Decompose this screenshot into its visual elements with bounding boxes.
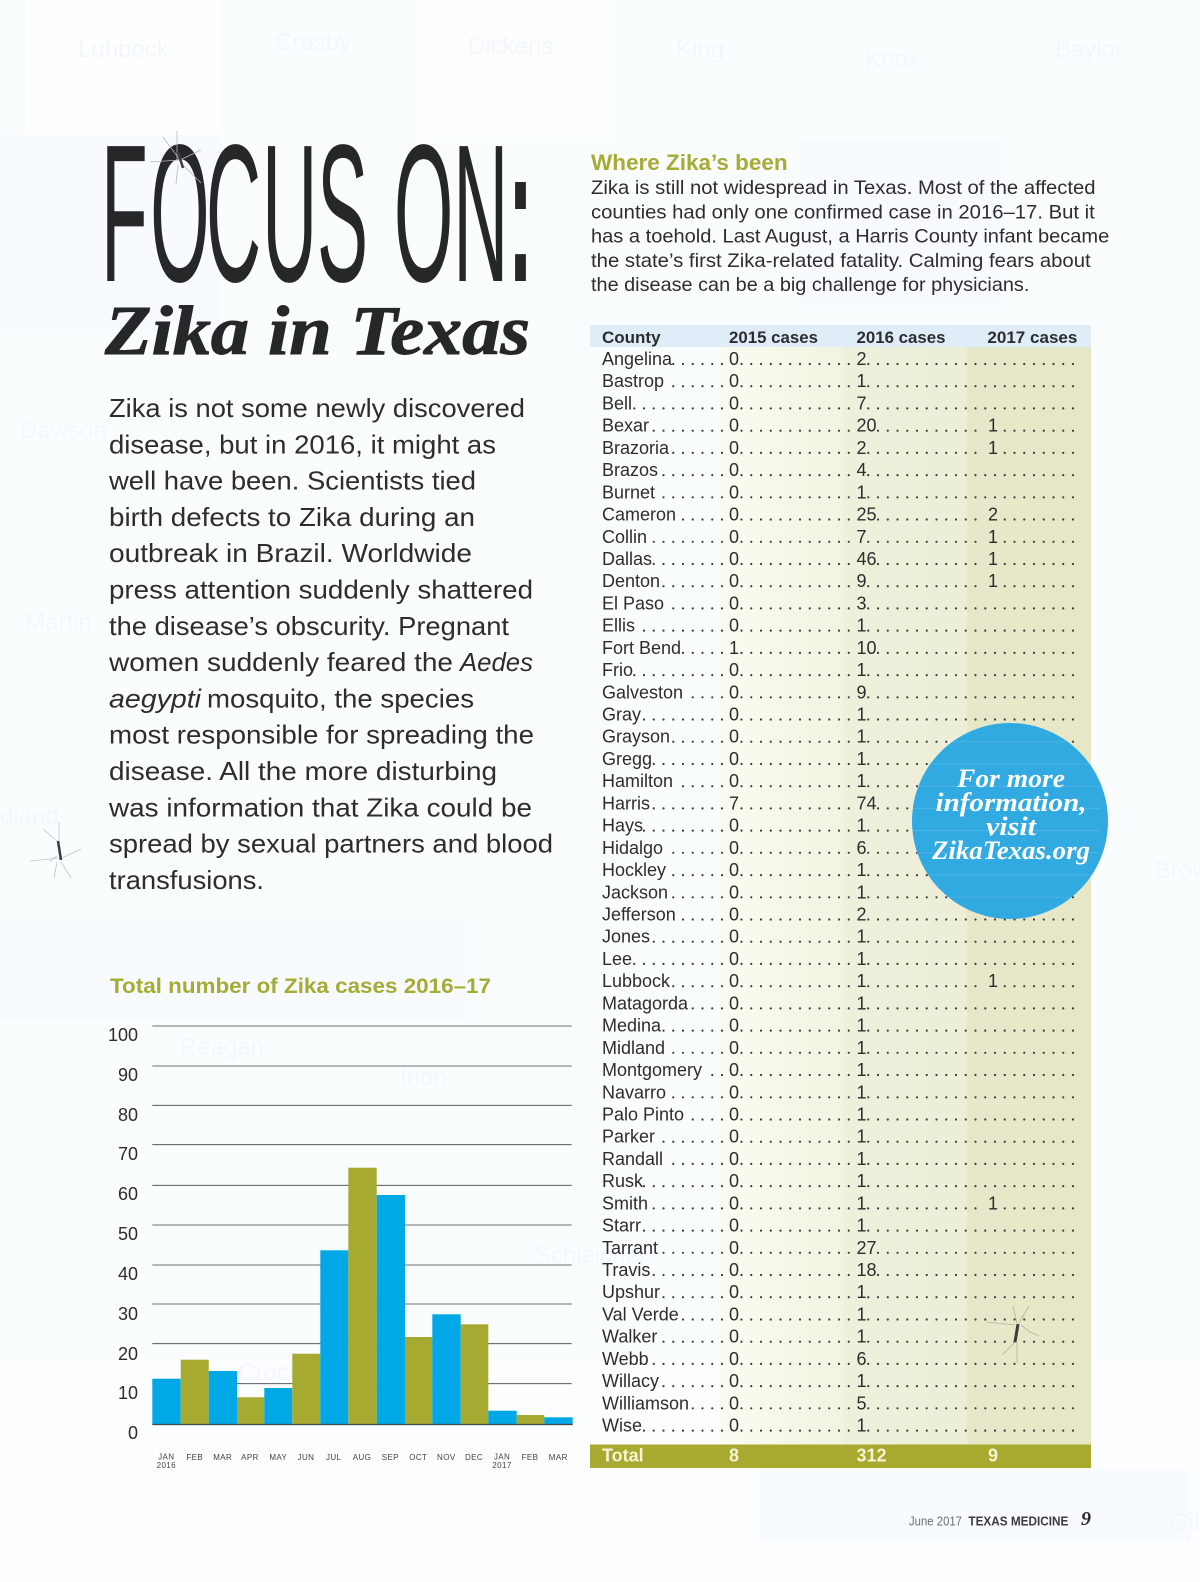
x axis labels: 2016 (157, 1461, 176, 1470)
table rows: 1 (856, 1216, 867, 1236)
table rows: 9 (856, 571, 867, 591)
y axis labels: 50 (118, 1224, 138, 1244)
y axis labels: 80 (118, 1105, 138, 1125)
table rows: 6 (856, 838, 867, 858)
background: faint county map: Dickens (468, 33, 553, 60)
table rows: Wise (602, 1416, 642, 1436)
table rows: Hockley (602, 860, 666, 880)
y axis labels: 10 (118, 1383, 138, 1403)
table rows: Brazos (602, 460, 658, 480)
table rows: 1 (988, 571, 998, 591)
table rows: 9 (856, 682, 867, 702)
table rows: Jackson (602, 882, 668, 902)
table rows: 0 (729, 482, 739, 502)
table rows: 0 (729, 816, 739, 836)
table rows: Hamilton (602, 771, 673, 791)
body text: disease. All the more disturbing (109, 756, 497, 786)
y axis labels: 0 (128, 1423, 138, 1443)
table rows: 0 (729, 1060, 739, 1080)
y axis labels: 70 (118, 1144, 138, 1164)
x axis labels: DEC (465, 1453, 483, 1462)
table rows: 0 (729, 393, 739, 413)
table rows: 1 (988, 527, 998, 547)
table rows: Lee (602, 949, 632, 969)
footer: June 2017 (909, 1514, 962, 1528)
table rows: 0 (729, 882, 739, 902)
body text: most responsible for spreading the (109, 720, 534, 750)
table rows: 1 (856, 771, 867, 791)
table rows: 0 (729, 1238, 739, 1258)
table rows: 2 (988, 504, 998, 524)
bar chart (108, 1025, 573, 1470)
table rows: 1 (856, 927, 867, 947)
x axis labels: FEB (186, 1453, 203, 1462)
table rows: Bexar (602, 416, 649, 436)
x axis labels: JAN (158, 1452, 174, 1462)
title: FOCUS ON: : (508, 103, 533, 323)
table rows: 0 (729, 860, 739, 880)
table rows: 1 (856, 949, 867, 969)
table rows: Montgomery (602, 1060, 702, 1080)
table rows: Starr (602, 1216, 641, 1236)
table rows: 0 (729, 438, 739, 458)
table rows: Williamson (602, 1393, 689, 1413)
body text: women suddenly feared the (108, 647, 453, 677)
table rows: 27 (856, 1238, 877, 1258)
table rows: 0 (729, 1171, 739, 1191)
table rows: 1 (856, 882, 867, 902)
table rows: 0 (729, 682, 739, 702)
table rows: 1 (988, 549, 998, 569)
background: faint county map: dland (0, 803, 59, 830)
table rows: 1 (988, 1193, 998, 1213)
table rows: Jefferson (602, 904, 676, 924)
table rows: Walker (602, 1327, 657, 1347)
table rows: Gray (602, 704, 641, 724)
table column shading (720, 347, 1091, 1445)
title: FOCUS ON: FOCUS ON (101, 103, 508, 323)
table rows: Palo Pinto (602, 1104, 684, 1124)
table total row: 8 (729, 1446, 739, 1466)
table rows: 1 (856, 1304, 867, 1324)
table rows: 46 (856, 549, 877, 569)
table rows: 74 (856, 793, 877, 813)
table rows: 1 (988, 971, 998, 991)
table rows: 2 (856, 349, 867, 369)
footer (909, 1508, 1091, 1530)
callout: more information: For more (956, 764, 1065, 793)
table rows: 0 (729, 1416, 739, 1436)
body text: the disease’s obscurity. Pregnant (109, 611, 510, 641)
table rows: 0 (729, 771, 739, 791)
table rows: 4 (856, 460, 867, 480)
table rows: 0 (729, 949, 739, 969)
background: faint county map: Gil (1170, 1509, 1199, 1536)
table rows: 1 (856, 1171, 867, 1191)
table rows: 0 (729, 1193, 739, 1213)
table rows: Bell (602, 393, 632, 413)
table rows: 1 (856, 1038, 867, 1058)
table rows: 0 (729, 993, 739, 1013)
body text: Zika is not some newly discovered (109, 393, 525, 423)
table rows: 0 (729, 549, 739, 569)
table rows: Travis (602, 1260, 650, 1280)
table rows: Navarro (602, 1082, 666, 1102)
table rows: 7 (856, 527, 867, 547)
table rows: 0 (729, 1393, 739, 1413)
body text (108, 393, 553, 895)
table rows: 18 (856, 1260, 877, 1280)
x axis labels: JAN (494, 1452, 510, 1462)
table rows: Jones (602, 927, 650, 947)
table rows: 5 (856, 1393, 867, 1413)
table rows: Midland (602, 1038, 665, 1058)
table rows: 0 (729, 349, 739, 369)
table rows: 1 (856, 1060, 867, 1080)
table rows: 1 (856, 1104, 867, 1124)
table header: County (602, 328, 661, 347)
body text: disease, but in 2016, it might as (109, 429, 496, 459)
background: faint county map: Crockett (238, 1359, 328, 1386)
x axis labels: JUL (326, 1453, 342, 1462)
x axis labels: OCT (409, 1453, 427, 1462)
intro paragraph: has a toehold. Last August, a Harris County infant became (591, 226, 1109, 248)
background: faint county map: Martin (25, 609, 92, 636)
table rows: 7 (856, 393, 867, 413)
table rows: 0 (729, 1216, 739, 1236)
table rows: 0 (729, 971, 739, 991)
table rows: 0 (729, 1016, 739, 1036)
icon: mosquito left margin (30, 822, 81, 878)
table rows: 0 (729, 1104, 739, 1124)
table rows: 0 (729, 660, 739, 680)
background: faint county map: Irion (400, 1064, 447, 1091)
table rows: 0 (729, 1149, 739, 1169)
table rows: 0 (729, 460, 739, 480)
table rows: Burnet (602, 482, 655, 502)
body text: birth defects to Zika during an (109, 502, 475, 532)
callout: more information (900, 723, 1108, 919)
table total row: 312 (856, 1446, 887, 1466)
body text: was information that Zika could be (108, 792, 532, 822)
table rows (602, 349, 998, 1436)
table rows: 0 (729, 1260, 739, 1280)
table total row: Total (602, 1446, 644, 1466)
table rows: 0 (729, 527, 739, 547)
body text: well have been. Scientists tied (108, 466, 476, 496)
table header: 2017 cases (987, 328, 1077, 347)
table rows: Gregg (602, 749, 652, 769)
table dot leaders (634, 364, 1073, 1431)
x axis labels: 2017 (492, 1461, 512, 1470)
table rows: Fort Bend (602, 638, 681, 658)
table rows: 10 (856, 638, 877, 658)
table rows: 0 (729, 1282, 739, 1302)
x axis labels: FEB (522, 1453, 538, 1462)
table rows: 0 (729, 371, 739, 391)
table rows: 0 (729, 838, 739, 858)
table rows: Hays (602, 816, 643, 836)
table rows: 1 (856, 1016, 867, 1036)
table rows: 0 (729, 927, 739, 947)
table rows: Hidalgo (602, 838, 663, 858)
table rows: 0 (729, 1304, 739, 1324)
table rows: 1 (856, 1371, 867, 1391)
table header: 2015 cases (729, 328, 818, 347)
intro paragraph: the disease can be a big challenge for physicians. (591, 274, 1029, 296)
x axis labels (157, 1452, 568, 1470)
table rows: 1 (856, 1193, 867, 1213)
table rows: Medina (602, 1016, 662, 1036)
table rows: 2 (856, 438, 867, 458)
table rows: 0 (729, 749, 739, 769)
footer: TEXAS MEDICINE (968, 1514, 1068, 1528)
table rows: 1 (856, 749, 867, 769)
icon: mosquito on table (987, 1306, 1039, 1363)
table rows: 0 (729, 504, 739, 524)
intro paragraph: Zika is still not widespread in Texas. Most of the affected (591, 177, 1096, 199)
table rows: 1 (856, 993, 867, 1013)
table header (590, 325, 1091, 347)
table rows: 20 (856, 416, 877, 436)
background: faint county map: Baylor (1055, 36, 1123, 63)
table rows: 1 (856, 371, 867, 391)
table rows: Harris (602, 793, 650, 813)
table rows: Smith (602, 1193, 648, 1213)
table rows: 0 (729, 1127, 739, 1147)
table rows: Dallas (602, 549, 652, 569)
table rows: Matagorda (602, 993, 689, 1013)
table rows: Bastrop (602, 371, 664, 391)
x axis labels: JUN (298, 1453, 314, 1462)
callout: more information: visit (986, 812, 1037, 841)
background: faint county map: Reagan (180, 1034, 264, 1061)
table rows: El Paso (602, 593, 664, 613)
y axis labels: 100 (108, 1025, 138, 1045)
callout: more information: ZikaTexas.org (931, 836, 1090, 865)
footer: 9 (1081, 1508, 1091, 1530)
table rows: 1 (856, 1082, 867, 1102)
x axis labels: MAR (213, 1453, 232, 1462)
y axis labels: 60 (118, 1184, 138, 1204)
table total row: 9 (988, 1446, 998, 1466)
table rows: Ellis (602, 616, 635, 636)
background: faint county map: Crosby (275, 29, 351, 56)
table rows: 0 (729, 416, 739, 436)
background: faint county map: Knox (865, 46, 920, 73)
body text: press attention suddenly shattered (109, 574, 533, 604)
table rows: 0 (729, 704, 739, 724)
table rows: 1 (856, 860, 867, 880)
x axis labels: APR (241, 1453, 259, 1462)
y axis labels: 30 (118, 1304, 138, 1324)
table rows: Randall (602, 1149, 663, 1169)
table rows: Cameron (602, 504, 676, 524)
intro paragraph (591, 177, 1109, 296)
table: county cases (590, 325, 1091, 1468)
table rows: 0 (729, 616, 739, 636)
body text: spread by sexual partners and blood (109, 829, 553, 859)
background: faint county map: Schleicher (535, 1242, 647, 1269)
table rows: Brazoria (602, 438, 670, 458)
table rows: 0 (729, 904, 739, 924)
table rows: Willacy (602, 1371, 659, 1391)
table header: 2016 cases (856, 328, 946, 347)
y axis labels: 20 (118, 1344, 138, 1364)
callout: more information: information, (936, 788, 1086, 817)
table rows: 1 (856, 704, 867, 724)
y axis labels: 40 (118, 1264, 138, 1284)
table rows: 1 (856, 660, 867, 680)
x axis labels: AUG (353, 1453, 371, 1462)
table rows: Parker (602, 1127, 655, 1147)
table rows: Rusk (602, 1171, 644, 1191)
table rows: 0 (729, 1349, 739, 1369)
table rows: 0 (729, 1327, 739, 1347)
table rows: 1 (856, 727, 867, 747)
x axis labels: MAY (269, 1453, 288, 1462)
table rows: 0 (729, 1082, 739, 1102)
body text: mosquito, the species (207, 683, 474, 713)
table total row (590, 1444, 1091, 1468)
table rows: 1 (856, 482, 867, 502)
intro paragraph: the state’s first Zika-related fatality. Calming fears about (591, 250, 1091, 272)
table rows: Grayson (602, 727, 670, 747)
table rows: Angelina (602, 349, 673, 369)
table rows: 1 (856, 1127, 867, 1147)
table rows: 1 (988, 438, 998, 458)
intro paragraph: counties had only one confirmed case in 2016–17. But it (591, 201, 1095, 223)
table rows: Collin (602, 527, 647, 547)
background: faint county map: Lubbock (78, 36, 170, 63)
table rows: 0 (729, 727, 739, 747)
bars (152, 1168, 573, 1424)
subtitle: Zika in Texas: Zika in Texas (104, 293, 530, 370)
table rows: 0 (729, 593, 739, 613)
background: faint county map: King (676, 36, 724, 63)
y axis labels: 90 (118, 1065, 138, 1085)
table rows: 7 (729, 793, 739, 813)
x axis labels: NOV (437, 1453, 456, 1462)
table rows: 2 (856, 904, 867, 924)
table rows: 0 (729, 1371, 739, 1391)
table rows: Galveston (602, 682, 683, 702)
background: faint county map: Dawson (20, 417, 107, 444)
table rows: 25 (856, 504, 877, 524)
table rows: 0 (729, 1038, 739, 1058)
chart heading: Total number of Zika cases 2016–17 (110, 975, 491, 998)
table rows: Webb (602, 1349, 649, 1369)
body text: aegypti (109, 683, 202, 713)
x axis labels: SEP (382, 1453, 399, 1462)
table rows: 1 (856, 1149, 867, 1169)
table rows: Upshur (602, 1282, 660, 1302)
table rows: 1 (856, 1416, 867, 1436)
table rows: Denton (602, 571, 660, 591)
body text: transfusions. (109, 865, 264, 895)
body text: Aedes (458, 647, 533, 677)
table rows: 1 (856, 1282, 867, 1302)
table rows: Frio (602, 660, 633, 680)
heading: Where Zika's been: Where Zika’s been (591, 150, 788, 175)
icon: mosquito on title (150, 131, 201, 184)
table rows: Tarrant (602, 1238, 658, 1258)
table rows: 1 (856, 816, 867, 836)
x axis labels: MAR (549, 1453, 568, 1462)
body text: outbreak in Brazil. Worldwide (109, 538, 472, 568)
table rows: 1 (856, 616, 867, 636)
table rows: 1 (856, 1327, 867, 1347)
table rows: 0 (729, 571, 739, 591)
table rows: 1 (988, 416, 998, 436)
table rows: Val Verde (602, 1304, 679, 1324)
table rows: 1 (856, 971, 867, 991)
y axis labels (108, 1025, 138, 1443)
table rows: Lubbock (602, 971, 671, 991)
table rows: 3 (856, 593, 867, 613)
table rows: 1 (729, 638, 739, 658)
table rows: 6 (856, 1349, 867, 1369)
